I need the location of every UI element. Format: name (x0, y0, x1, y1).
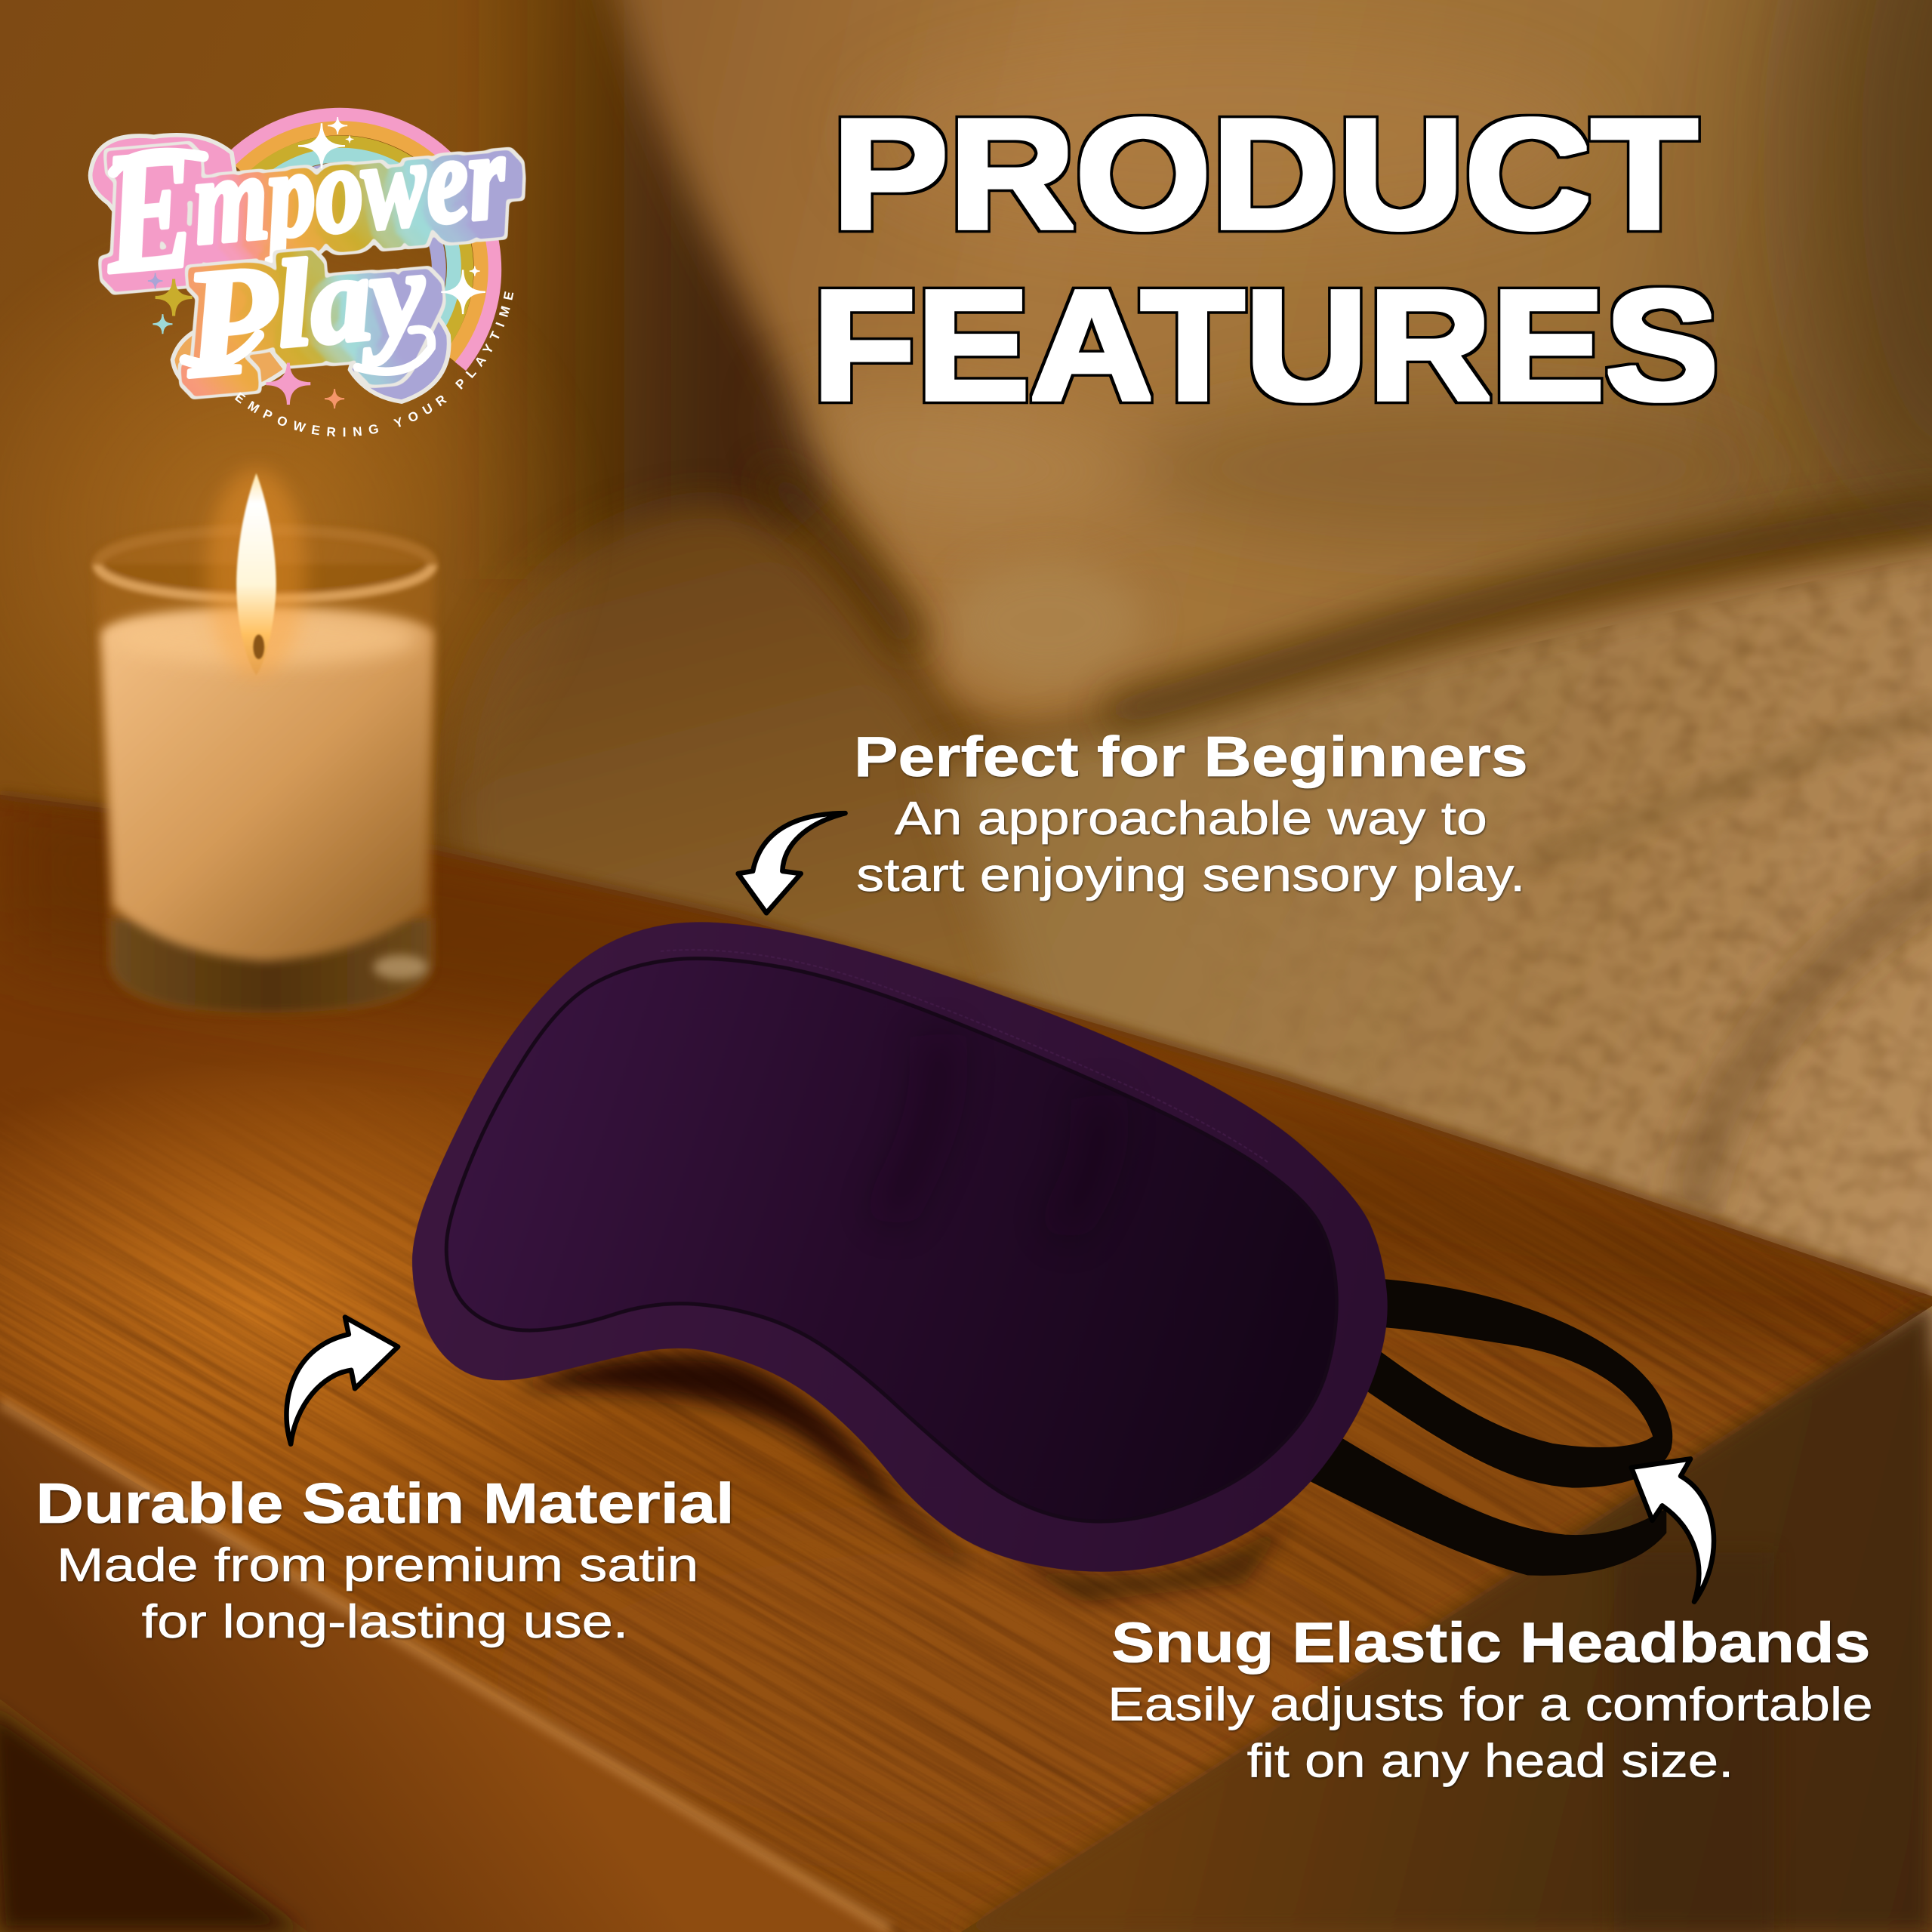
title line 1: PRODUCT (832, 86, 1698, 261)
mask shadow under arch (517, 1354, 973, 1571)
logo blob: P swash (172, 318, 286, 395)
callout: Snug Elastic Headbands (1108, 1611, 1873, 1787)
table top (0, 795, 1932, 1932)
mask satin folds (887, 1035, 1100, 1232)
glass foot reflection (374, 955, 427, 979)
wax (101, 608, 433, 961)
product: satin eye mask (414, 924, 1385, 1602)
icon: candle in glass (95, 468, 435, 1013)
logo word: Play: lay (270, 225, 430, 374)
lower pillow corner (951, 558, 1144, 686)
glass body (95, 528, 435, 1013)
top right shade (1811, 0, 1932, 530)
logo white swashes (113, 153, 432, 371)
side face and dark area at right (956, 1301, 1932, 1932)
mask inner panel (446, 958, 1336, 1521)
callout heading: Snug Elastic Headbands (1111, 1611, 1870, 1675)
table highlight edge (0, 1402, 889, 1930)
logo tagline: EMPOWERING YOUR PLAYTIME (234, 291, 513, 436)
title (812, 86, 1719, 433)
dark seam pillow to cushion (764, 474, 918, 647)
background photo: bedside scene (0, 0, 1932, 1378)
callout heading: Durable Satin Material (35, 1471, 735, 1535)
pillow lobes (788, 37, 1774, 542)
logo sparkles (148, 117, 485, 408)
glass rim (97, 530, 433, 564)
callout: Perfect for Beginners: start enjoying sensory play. (856, 849, 1525, 901)
callout heading: Perfect for Beginners (854, 725, 1528, 788)
arrow: to headbands (1632, 1459, 1714, 1602)
wax top glow (111, 611, 419, 665)
floor left (0, 1706, 302, 1932)
callout: Snug Elastic Headbands: fit on any head size. (1247, 1735, 1733, 1787)
logo word: Play: P (177, 233, 286, 411)
table: top, front and side (0, 770, 1932, 1932)
logo: Empower Play (88, 107, 526, 436)
mask contact shadow (986, 1515, 1294, 1602)
front face (0, 1402, 889, 1932)
pillow (591, 0, 1932, 729)
table leg panel (1614, 1552, 1774, 1932)
blanket (936, 530, 1932, 1392)
candle glow (0, 197, 616, 862)
mask stitching (661, 950, 1269, 1163)
logo blob: y swash (350, 304, 449, 402)
callout body: An approachable way to (895, 793, 1487, 845)
title line 2: FEATURES (812, 257, 1719, 433)
blanket folds (1528, 708, 1932, 862)
logo word: Empower: mpower (187, 108, 512, 270)
dark wedge between wall and pillow (456, 0, 838, 579)
callout: Durable Satin Material: for long-lasting use. (142, 1596, 628, 1648)
dark fold between pillow and blanket (1109, 507, 1932, 715)
callout body: Easily adjusts for a comfortable (1108, 1678, 1873, 1730)
callout: Durable Satin Material (35, 1471, 735, 1648)
logo blob: E swash (91, 135, 246, 273)
upper band loop (1343, 1277, 1672, 1487)
flame (207, 468, 306, 678)
arrow: to mask material (286, 1317, 398, 1444)
glass foot (111, 918, 431, 1013)
soft back edge of the table (0, 795, 1932, 1296)
sofa cushion (454, 504, 1109, 1072)
lower band (1281, 1417, 1665, 1575)
callout body: Made from premium satin (57, 1539, 698, 1592)
arrow: to mask top (738, 813, 846, 913)
rainbow arcs (230, 115, 495, 366)
product: elastic headbands (1281, 1277, 1672, 1575)
blanket knit texture (1385, 566, 1932, 1276)
table top lighting and grain (0, 770, 1932, 1848)
logo word: Empower: E (97, 109, 228, 310)
callout: Perfect for Beginners (854, 725, 1528, 901)
mask outer (414, 924, 1385, 1570)
